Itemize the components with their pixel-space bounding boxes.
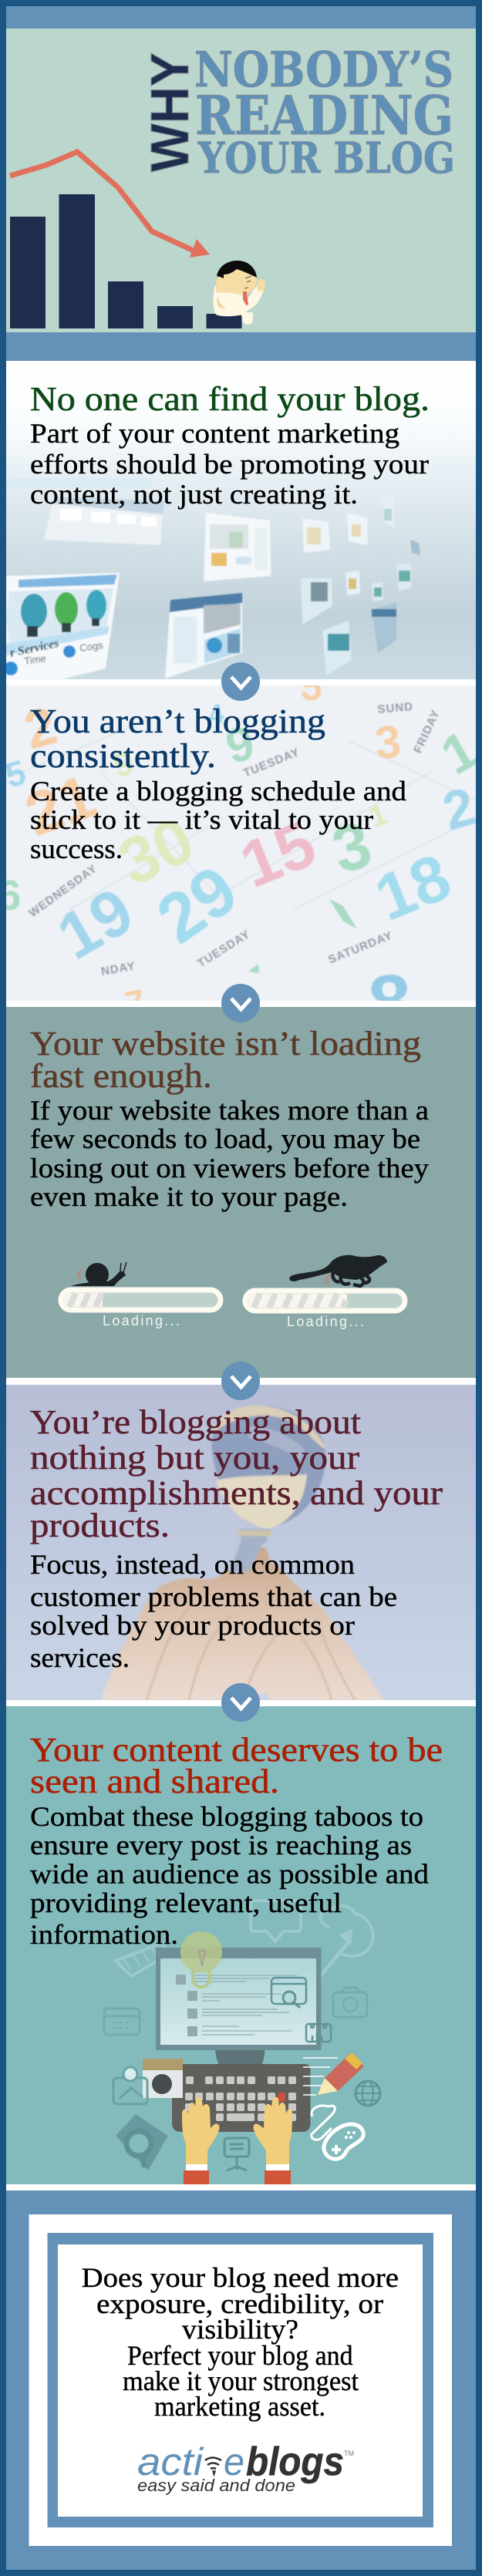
call to action text: make it your strongest: [123, 2366, 359, 2396]
calendar photo: 1: [364, 796, 392, 834]
white divider 4: [6, 1700, 476, 1706]
icon: light bulb: [180, 1931, 222, 1988]
calendar photo: 9: [109, 742, 138, 785]
body text: content, not just creating it.: [30, 479, 358, 510]
body text: [30, 1095, 429, 1212]
body text: Focus, instead, on common: [30, 1549, 355, 1580]
heading: [30, 1403, 443, 1544]
calendar photo: 15: [231, 807, 325, 902]
panel: you aren't blogging consistently: [0, 664, 482, 1047]
panel: your content deserves to be seen: [6, 1706, 476, 2184]
calendar photo: 18: [366, 840, 460, 935]
title: WHY: [140, 52, 200, 172]
call to action text: [82, 2262, 399, 2422]
bar chart: [10, 194, 242, 328]
heading: [30, 702, 325, 775]
heading: [30, 1025, 421, 1095]
icon: chevron button 1: [221, 662, 260, 701]
calendar photo: SUND: [377, 700, 414, 716]
icon: disappointed man: [213, 261, 265, 325]
body text: stick to it — it’s vital to your: [30, 804, 373, 835]
heading: You aren’t blogging: [30, 702, 325, 740]
heading: nothing but you, your: [30, 1439, 359, 1477]
logo: activeblogs: e: [224, 2440, 244, 2483]
web page panels photo: Cogs: [79, 639, 104, 654]
panel: call to action: [6, 2190, 476, 2570]
body text: solved by your products or: [30, 1610, 355, 1641]
body text: providing relevant, useful: [30, 1887, 342, 1918]
calendar photo: 2: [436, 776, 481, 842]
calendar photo: 2: [18, 695, 62, 761]
panel: website isn't loading fast enough: [6, 1007, 476, 1378]
web page panels photo: Time: [23, 652, 47, 667]
icon: monitor: [156, 1948, 321, 2066]
calendar photo: 19: [46, 874, 145, 974]
call to action text: visibility?: [182, 2314, 298, 2345]
calendar photo: WEDNESDAY: [26, 862, 99, 920]
icon: browser search: [271, 1978, 306, 2008]
loading label: Loading...: [103, 1313, 180, 1328]
icon: game controller: [312, 2106, 363, 2159]
call to action text: marketing asset.: [154, 2391, 325, 2422]
logo: activeblogs: acti: [137, 2440, 204, 2483]
body text: customer problems that can be: [30, 1581, 397, 1612]
body text: [30, 1549, 397, 1673]
heading: Your content deserves to be: [30, 1731, 443, 1769]
trophy and hands photo: [101, 1406, 384, 1700]
white divider 5: [6, 2184, 476, 2190]
body text: losing out on viewers before they: [30, 1153, 429, 1184]
icon: typing hands: [182, 2097, 292, 2184]
body text: [30, 776, 406, 864]
body text: wide an audience as possible and: [30, 1858, 429, 1889]
calendar photo: 30: [108, 803, 205, 900]
panel: blogging about nothing but you: [6, 1385, 476, 1700]
web page panels photo: [4, 478, 420, 679]
heading: consistently.: [30, 737, 216, 775]
icon: small calendar: [306, 2024, 331, 2042]
icon: presentation board: [224, 2138, 249, 2170]
white divider 1: [6, 679, 476, 685]
icon: chevron button 2: [221, 984, 260, 1022]
body text: ensure every post is reaching as: [30, 1830, 412, 1860]
call to action text: Perfect your blog and: [127, 2340, 353, 2371]
body text: efforts should be promoting your: [30, 449, 429, 480]
calendar photo: TUESDAY: [195, 928, 253, 970]
calendar photo: 29: [143, 851, 251, 958]
logo: activeblogs: [137, 2440, 354, 2495]
calendar photo: 21: [16, 761, 105, 849]
icon: chevron button 3: [221, 1362, 260, 1400]
arrow: falling trend line: [10, 152, 210, 258]
body text: If your website takes more than a: [30, 1095, 429, 1126]
body text: Create a blogging schedule and: [30, 776, 406, 806]
heading: [30, 1731, 443, 1800]
body text: [30, 1801, 429, 1950]
icon: snail: [71, 1262, 126, 1286]
icon: magnifier badge: [116, 2114, 168, 2170]
logo: activeblogs: easy said and done: [137, 2476, 295, 2495]
icon: keyboard: [172, 2064, 310, 2132]
title: [140, 41, 455, 183]
logo: activeblogs: blogs: [246, 2440, 344, 2484]
heading: fast enough.: [30, 1057, 212, 1095]
icon: map pin: [113, 2067, 147, 2104]
calendar photo: [6, 685, 476, 1001]
illustration: computer and icons: [104, 1901, 380, 2184]
calendar photo: 9: [221, 716, 260, 774]
icon: faded background symbols: [116, 1901, 373, 1983]
body text: success.: [30, 833, 123, 864]
calendar photo: 7: [122, 982, 148, 1024]
calendar photo: 8: [366, 958, 416, 1047]
panel: no one can find your blog: [4, 361, 476, 679]
white divider 3: [6, 1378, 476, 1385]
body text: even make it to your page.: [30, 1181, 348, 1212]
calendar photo: 4: [206, 698, 227, 730]
call to action text: Does your blog need more: [82, 2262, 399, 2293]
heading: Your website isn’t loading: [30, 1025, 421, 1062]
icon: chevron button 4: [221, 1683, 260, 1722]
calendar photo: 3: [373, 716, 403, 769]
icon: globe: [356, 2081, 380, 2106]
heading: No one can find your blog.: [30, 380, 430, 418]
body text: Combat these blogging taboos to: [30, 1801, 423, 1832]
icon: photo camera: [143, 2059, 183, 2098]
heading: You’re blogging about: [30, 1403, 361, 1441]
heading: seen and shared.: [30, 1763, 279, 1800]
calendar photo: TUESDAY: [241, 746, 302, 780]
body text: [30, 418, 429, 510]
title: READING: [195, 85, 453, 147]
loading label: Loading...: [287, 1314, 364, 1329]
body text: few seconds to load, you may be: [30, 1123, 420, 1154]
heading: products.: [30, 1507, 170, 1544]
icon: pencil: [303, 2052, 364, 2095]
calendar photo: NDAY: [100, 959, 137, 978]
body text: services.: [30, 1642, 130, 1673]
calendar photo: 5: [1, 753, 30, 795]
icon: cheetah: [289, 1255, 387, 1286]
calendar photo: 5: [298, 664, 326, 710]
calendar photo: FRIDAY: [411, 708, 443, 756]
logo: activeblogs: TM: [344, 2450, 354, 2457]
loading bar: fast: [245, 1291, 405, 1329]
panel: header: [6, 6, 476, 361]
web page panels photo: r Services: [8, 637, 60, 660]
calendar photo: SATURDAY: [326, 929, 395, 967]
body text: Part of your content marketing: [30, 418, 399, 449]
loading bar: slow: [61, 1290, 221, 1328]
body text: information.: [30, 1919, 178, 1950]
call to action text: exposure, credibility, or: [96, 2288, 383, 2319]
heading: accomplishments, and your: [30, 1474, 443, 1512]
calendar photo: 3: [325, 807, 379, 887]
white divider 2: [6, 1001, 476, 1007]
